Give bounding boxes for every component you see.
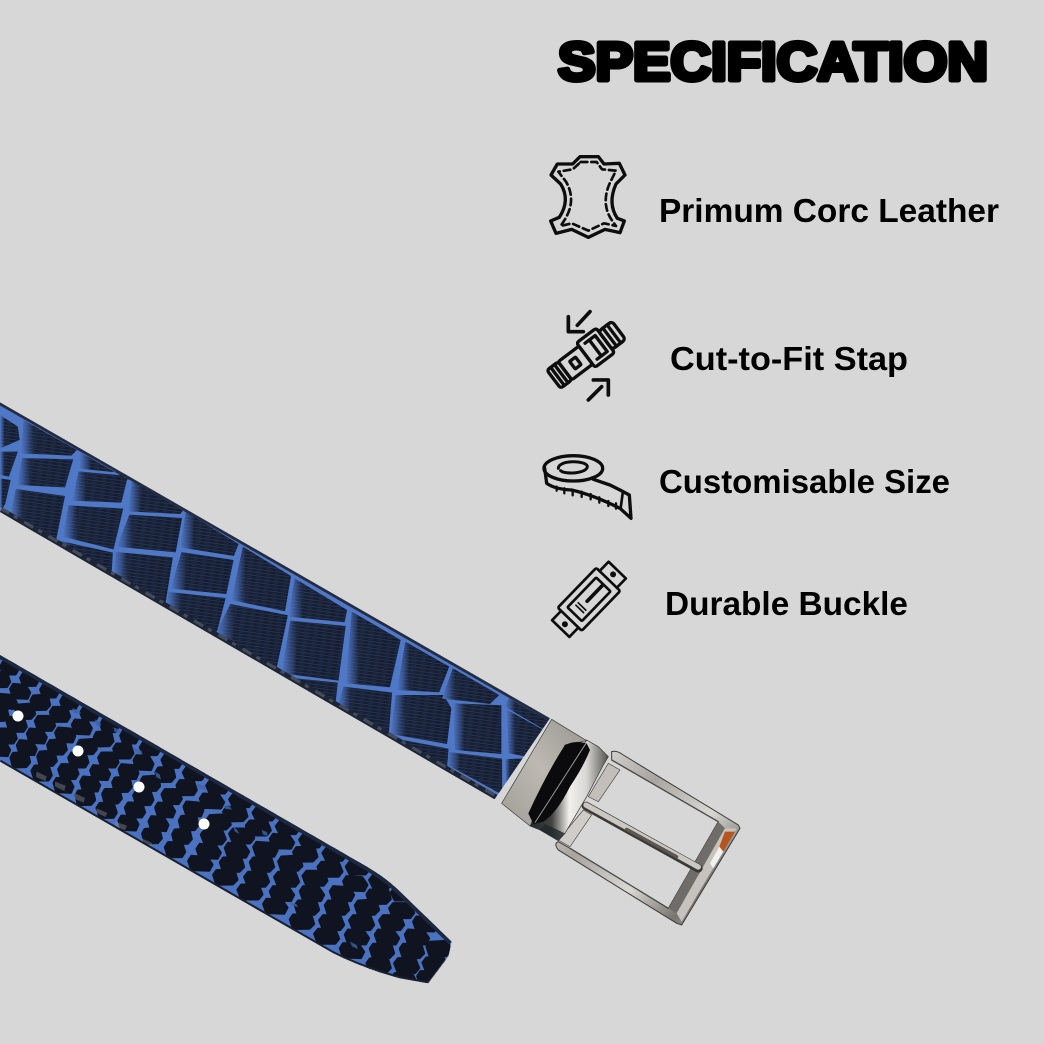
buckle bar: [558, 763, 620, 847]
spec item: strap: [545, 312, 908, 400]
label: strap: Cut-to-Fit Stap: [670, 340, 908, 377]
buckle frame shading: [570, 760, 737, 922]
spec item: buckle: [549, 558, 908, 640]
belt strap: upper crocodile section: [0, 390, 568, 810]
buckle frame: [556, 751, 740, 925]
metal buckle: [502, 719, 740, 925]
title: SPECIFICATION: [558, 32, 988, 92]
icon: leather hide: [551, 157, 625, 237]
buckle pin: [586, 805, 698, 868]
belt strap: lower tip section: [0, 655, 452, 984]
icon: cut to fit strap: [545, 312, 628, 400]
buckle keeper: [502, 719, 608, 841]
label: buckle: Durable Buckle: [665, 585, 908, 622]
spec item: leather: [551, 157, 999, 237]
icon: measuring tape: [544, 456, 631, 518]
icon: buckle: [549, 558, 629, 640]
label: leather: Primum Corc Leather: [659, 192, 999, 229]
spec item: size: [544, 456, 950, 518]
belt holes: [12, 710, 210, 830]
label: size: Customisable Size: [659, 463, 950, 500]
